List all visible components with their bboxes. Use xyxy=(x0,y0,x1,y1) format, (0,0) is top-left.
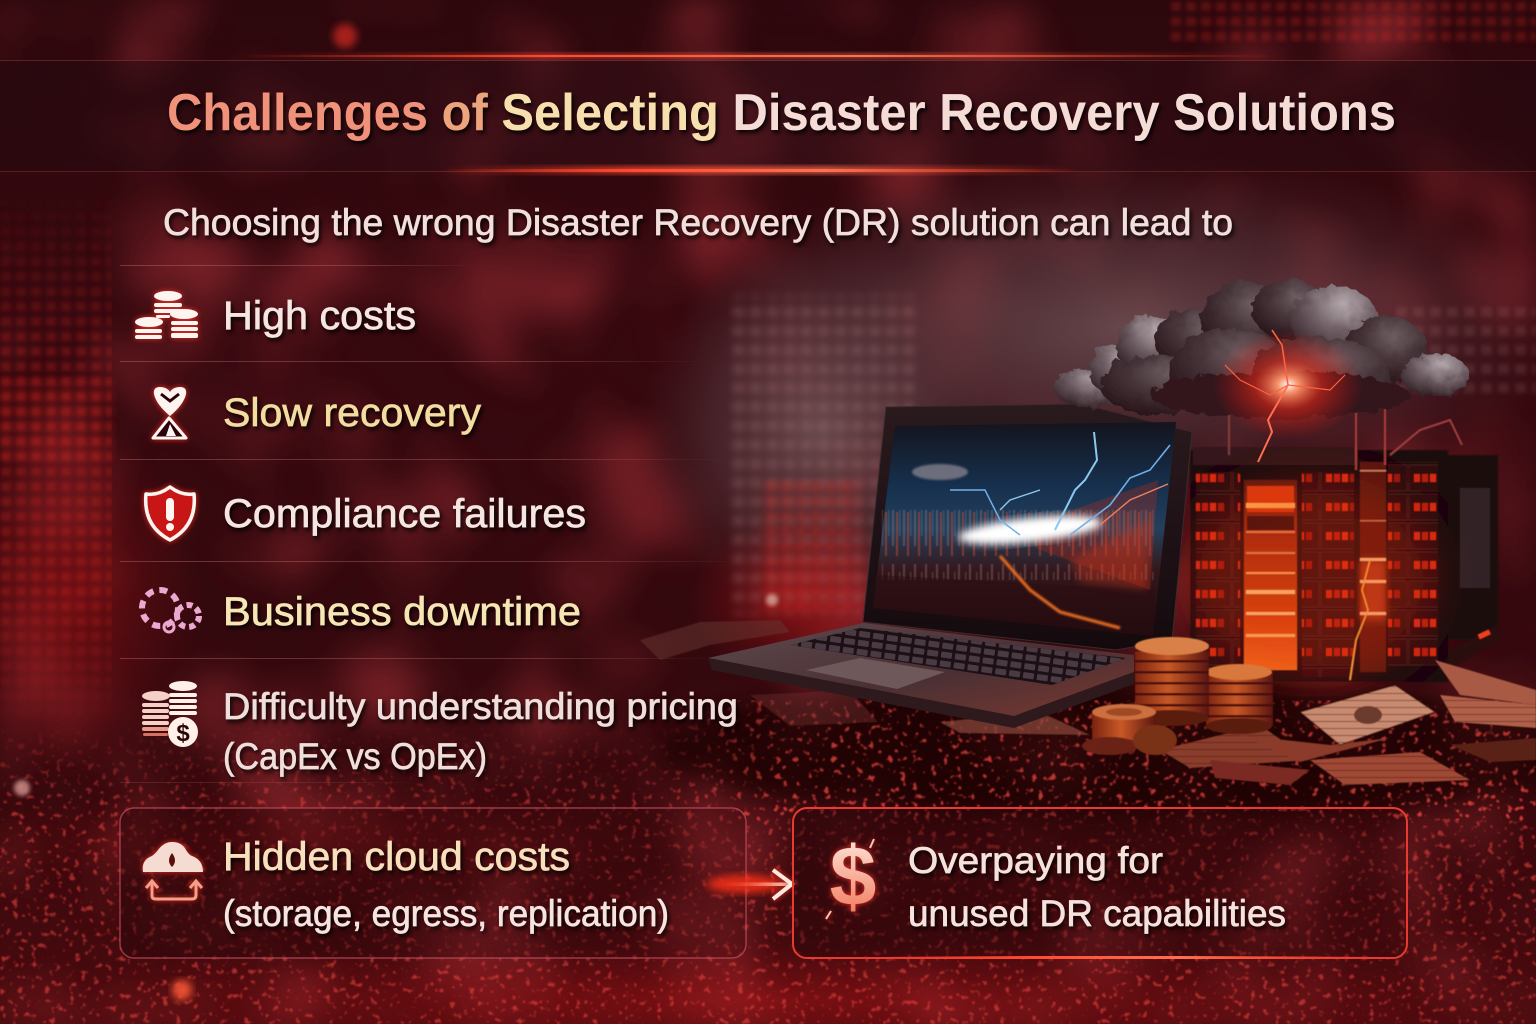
icon: warning shield xyxy=(146,487,194,540)
server rack xyxy=(1185,395,1498,682)
callout: overpaying xyxy=(793,808,1407,959)
storm cloud xyxy=(1054,280,1469,462)
callout: overpaying: unused DR capabilities xyxy=(908,893,1286,934)
subtitle: Choosing the wrong Disaster Recovery (DR) solution can lead to xyxy=(163,202,1233,243)
arrow xyxy=(707,870,792,899)
list item: slow recovery: Slow recovery xyxy=(223,391,481,435)
list item: difficulty understanding pricing: Difficulty understanding pricing xyxy=(223,686,738,727)
list dividers xyxy=(120,265,750,783)
icon: hourglass xyxy=(153,387,186,438)
list item: difficulty understanding pricing: (CapEx vs OpEx) xyxy=(223,736,487,777)
list item: compliance failures: Compliance failures xyxy=(223,492,586,536)
icon: coin stacks xyxy=(135,291,198,339)
list item: slow recovery xyxy=(153,387,481,438)
illustration: cloud, laptop, server, coins, cash xyxy=(640,280,1536,820)
ground xyxy=(660,680,1536,820)
list item: high costs xyxy=(135,291,416,339)
list item: high costs: High costs xyxy=(223,294,416,338)
icon: broken gears xyxy=(142,590,199,632)
list item: difficulty understanding pricing xyxy=(142,681,738,777)
icon: coins with dollar: $ xyxy=(176,720,190,747)
list item: business downtime: Business downtime xyxy=(223,590,581,634)
coin stacks xyxy=(1082,637,1273,755)
icon: cloud with arrows xyxy=(143,842,203,899)
cash on table xyxy=(640,620,1536,785)
callout: hidden cloud costs: (storage, egress, replication) xyxy=(223,893,669,934)
laptop base xyxy=(708,623,1134,716)
laptop xyxy=(708,404,1192,728)
list item: compliance failures xyxy=(146,487,586,540)
icon: glowing dollar: $ xyxy=(830,829,876,923)
callout: hidden cloud costs: Hidden cloud costs xyxy=(223,835,570,879)
callout: hidden cloud costs xyxy=(120,808,746,958)
callout: overpaying: Overpaying for xyxy=(908,840,1163,881)
title: Challenges of Selecting Disaster Recovery Solutions xyxy=(167,84,1396,142)
icon: coins with dollar xyxy=(142,681,198,747)
title band xyxy=(0,53,1536,174)
